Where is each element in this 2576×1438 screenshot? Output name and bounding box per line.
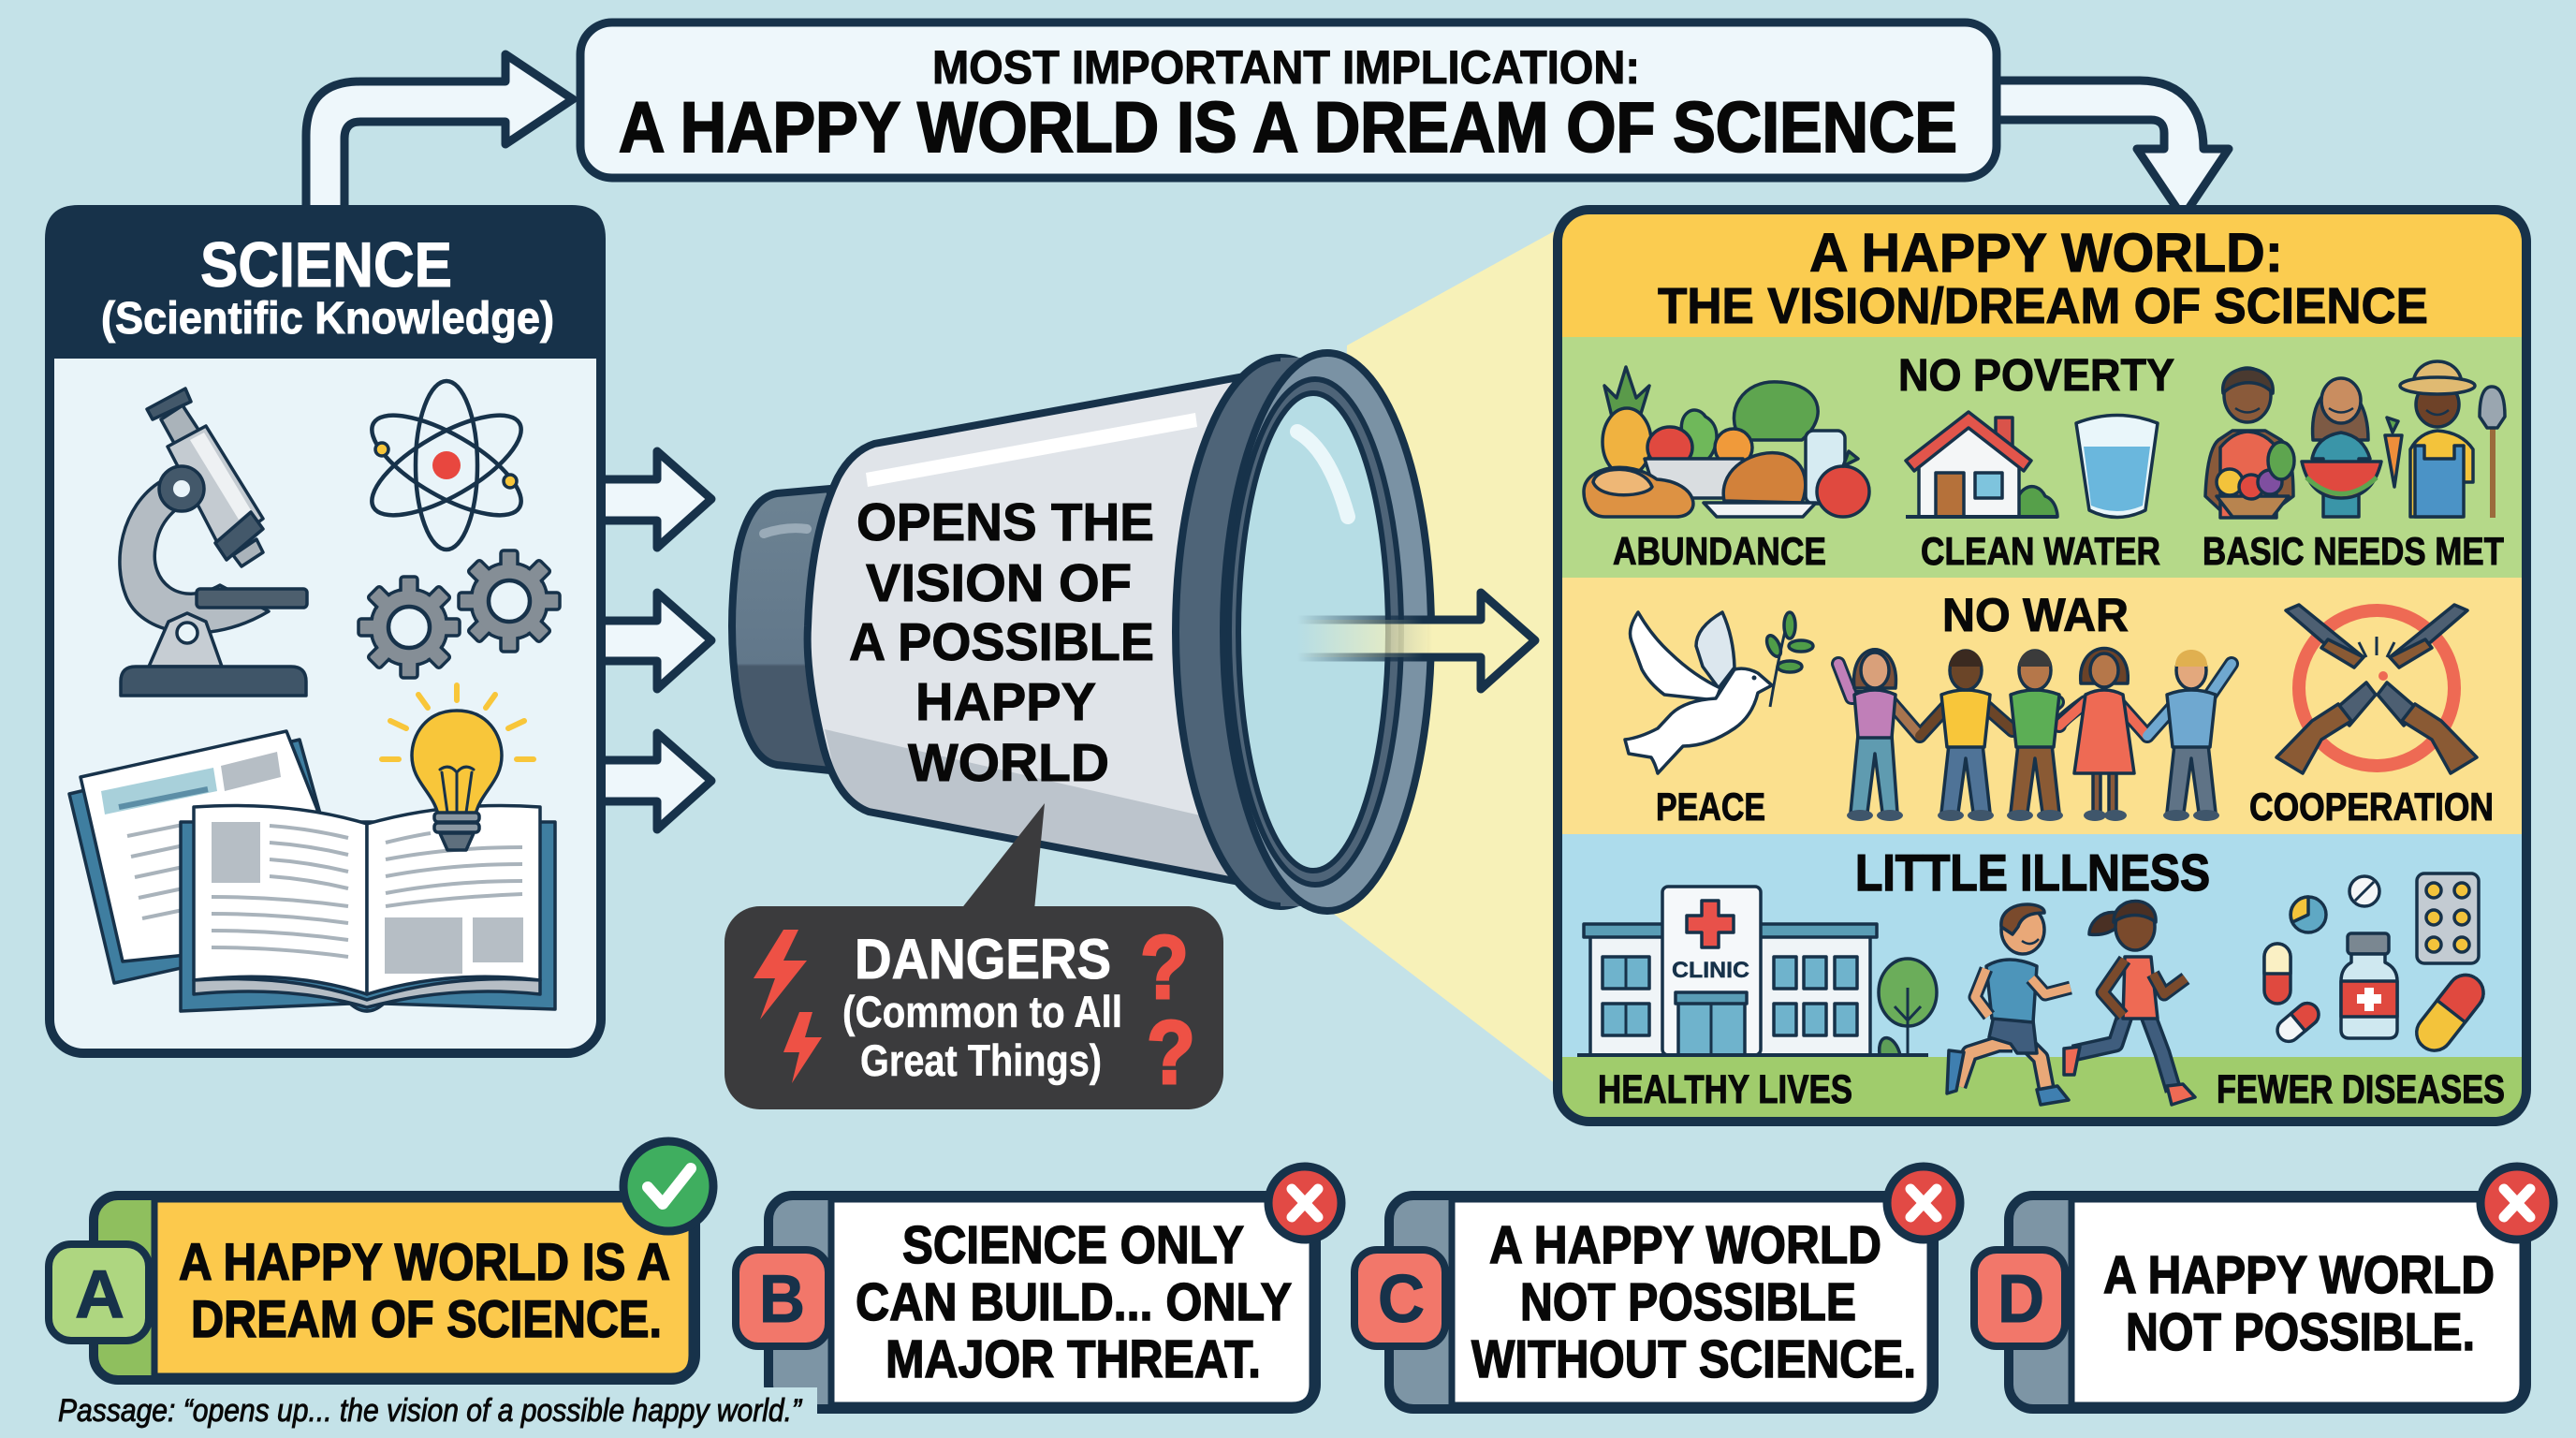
telescope text: WORLD xyxy=(908,733,1109,793)
label: abundance: ABUNDANCE xyxy=(1613,529,1826,573)
icon: food abundance xyxy=(1584,367,1869,517)
label: cooperation: COOPERATION xyxy=(2249,785,2494,829)
passage citation xyxy=(47,1387,817,1432)
arrow: lens to happy world xyxy=(1297,593,1535,689)
telescope text: HAPPY xyxy=(915,672,1096,732)
option text: NOT POSSIBLE xyxy=(1520,1272,1856,1332)
panel: science xyxy=(45,205,606,1053)
icon: open book xyxy=(181,805,555,1011)
icon: atom xyxy=(359,381,534,550)
label: fewer diseases: FEWER DISEASES xyxy=(2217,1067,2505,1112)
option body xyxy=(2071,1199,2523,1405)
option text: NOT POSSIBLE. xyxy=(2126,1302,2475,1362)
label: peace: PEACE xyxy=(1656,785,1765,829)
icon: people holding hands xyxy=(1838,648,2232,821)
option body xyxy=(154,1199,692,1376)
option B xyxy=(736,1167,1341,1409)
label: healthy lives: HEALTHY LIVES xyxy=(1598,1067,1852,1112)
person 2 xyxy=(1938,650,1994,821)
icon: lightning bolts xyxy=(754,930,822,1083)
option letter: B xyxy=(759,1262,805,1337)
telescope body xyxy=(808,374,1254,885)
icon: question marks xyxy=(1140,917,1195,1103)
icon: dove xyxy=(1625,612,1813,773)
option text: WITHOUT SCIENCE. xyxy=(1471,1329,1916,1389)
icon: clinic xyxy=(1577,887,1928,1055)
band: header xyxy=(1558,210,2526,337)
option card xyxy=(1389,1196,1934,1409)
lens rim front xyxy=(1223,353,1431,911)
option text: SCIENCE ONLY xyxy=(902,1215,1244,1275)
icon: crossed rifles with prohibition sign xyxy=(2276,605,2477,773)
eyepiece xyxy=(732,489,830,770)
panel: a happy world xyxy=(1558,210,2526,1122)
option letter: C xyxy=(1378,1262,1425,1337)
callout box xyxy=(724,906,1223,1109)
label: basic needs met: BASIC NEEDS MET xyxy=(2203,529,2504,573)
icon: wrong cross xyxy=(1268,1167,1341,1240)
dangers subtext: (Common to All xyxy=(842,987,1122,1036)
icon: tree xyxy=(1879,959,1937,1055)
icon: question marks: ? xyxy=(1140,917,1189,1018)
title kicker: MOST IMPORTANT IMPLICATION: xyxy=(932,41,1640,94)
telescope text xyxy=(849,492,1154,793)
icon: glass of water xyxy=(2076,416,2158,517)
option text xyxy=(856,1215,1292,1389)
option body xyxy=(831,1199,1312,1405)
arrows: science to lens xyxy=(599,451,711,829)
callout pointer xyxy=(960,803,1045,910)
person 5 xyxy=(2163,650,2219,821)
icon: runner woman xyxy=(2064,901,2195,1105)
citation text: Passage: “opens up... the vision of a possible happy world.” xyxy=(58,1393,802,1429)
heading: little illness: LITTLE ILLNESS xyxy=(1855,844,2210,902)
label: clean water: CLEAN WATER xyxy=(1921,529,2160,573)
body outline xyxy=(808,374,1254,885)
light beam xyxy=(1331,230,1556,1084)
eyepiece highlight xyxy=(764,528,807,534)
icon: people with food xyxy=(2205,361,2505,518)
heading: no poverty: NO POVERTY xyxy=(1898,351,2174,401)
band: ground xyxy=(1558,1057,2526,1122)
option letter badge xyxy=(736,1250,828,1346)
panel title: A HAPPY WORLD: xyxy=(1809,223,2283,284)
option card xyxy=(2009,1196,2526,1409)
arms xyxy=(1838,664,2232,736)
panel title xyxy=(1658,223,2428,334)
option text xyxy=(179,1232,670,1348)
option letter badge xyxy=(1354,1250,1445,1346)
option C xyxy=(1354,1167,1960,1409)
arrow: science to implication xyxy=(306,54,573,208)
option text xyxy=(2103,1245,2495,1362)
icon: gears xyxy=(359,550,560,678)
option text: A HAPPY WORLD xyxy=(2103,1245,2495,1305)
telescope text: VISION OF xyxy=(866,553,1132,613)
option card xyxy=(94,1196,695,1380)
lens inner ring xyxy=(1229,379,1401,885)
panel header xyxy=(45,205,606,359)
option letter: D xyxy=(1998,1262,2044,1337)
arrow: implication to happy world xyxy=(1994,81,2229,217)
band: little illness xyxy=(1558,834,2526,1057)
telescope text: OPENS THE xyxy=(856,492,1154,552)
lens rim back xyxy=(1176,358,1385,906)
callout: dangers xyxy=(724,803,1223,1109)
band: no poverty xyxy=(1558,337,2526,578)
dangers subtext xyxy=(842,987,1122,1085)
clinic sign: CLINIC xyxy=(1672,958,1749,983)
man xyxy=(2205,368,2294,518)
farmer xyxy=(2385,361,2505,518)
lens highlight xyxy=(1297,432,1348,517)
icon: runner man xyxy=(1947,904,2071,1105)
icon: medicine xyxy=(2264,873,2491,1058)
option text: MAJOR THREAT. xyxy=(886,1329,1261,1389)
icon: back journal xyxy=(69,731,323,983)
icon: microscope xyxy=(120,389,307,696)
option letter: A xyxy=(75,1257,124,1332)
icon: telescope xyxy=(732,353,1431,911)
option D xyxy=(1974,1167,2554,1409)
option text: A HAPPY WORLD IS A xyxy=(179,1232,670,1291)
option letter badge xyxy=(49,1244,149,1341)
dangers subtext: Great Things) xyxy=(860,1035,1102,1085)
option text xyxy=(1471,1215,1916,1389)
dangers text: DANGERS xyxy=(855,928,1111,990)
person 3 xyxy=(2007,650,2063,821)
icon: light bulb xyxy=(382,685,534,850)
panel border xyxy=(1558,210,2526,1122)
lens rim side xyxy=(1281,358,1327,906)
band: no war xyxy=(1558,578,2526,834)
person 4 xyxy=(2074,648,2134,821)
option text: DREAM OF SCIENCE. xyxy=(191,1289,662,1348)
title box xyxy=(580,22,1997,178)
telescope text: A POSSIBLE xyxy=(849,612,1154,672)
icon: house xyxy=(1906,412,2057,517)
heading: no war: NO WAR xyxy=(1942,589,2129,641)
option text: CAN BUILD... ONLY xyxy=(856,1272,1292,1332)
person 1 xyxy=(1847,650,1903,821)
heading: science: SCIENCE xyxy=(200,229,452,301)
woman xyxy=(2302,378,2381,517)
body highlight xyxy=(866,413,1197,487)
icon: wrong cross xyxy=(1887,1167,1960,1240)
icon: correct check xyxy=(623,1141,713,1231)
icon: question marks: ? xyxy=(1147,1003,1195,1103)
option card xyxy=(768,1196,1316,1409)
body shaded band xyxy=(825,729,1254,885)
panel title: THE VISION/DREAM OF SCIENCE xyxy=(1658,278,2428,334)
panel background xyxy=(1558,210,2526,1122)
option text: A HAPPY WORLD xyxy=(1489,1215,1881,1275)
option body xyxy=(1452,1199,1930,1405)
citation backing xyxy=(47,1387,817,1432)
option letter badge xyxy=(1974,1250,2065,1346)
main title: A HAPPY WORLD IS A DREAM OF SCIENCE xyxy=(619,88,1957,168)
lens glass xyxy=(1238,393,1388,871)
icon: wrong cross xyxy=(2481,1167,2554,1240)
subheading: scientific knowledge: (Scientific Knowledge) xyxy=(101,294,554,344)
option A xyxy=(49,1141,713,1380)
